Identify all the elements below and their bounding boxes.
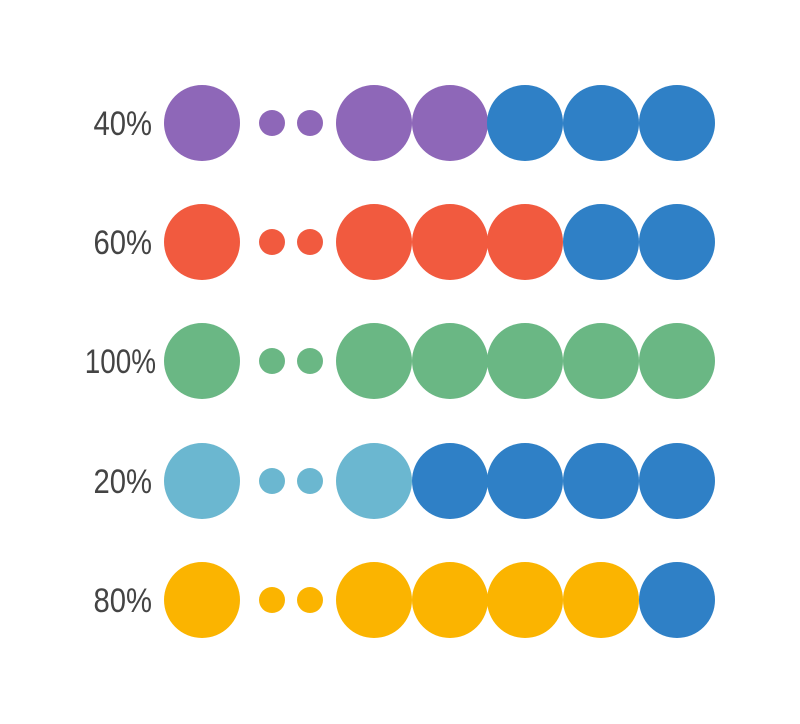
label: 40%: 40% xyxy=(94,104,152,143)
label: 20%: 20% xyxy=(94,462,152,501)
row: 40% xyxy=(94,85,715,161)
row: 100% xyxy=(85,323,715,399)
label: 60%: 60% xyxy=(94,223,152,262)
row: 80% xyxy=(94,562,715,638)
label: 100%: 100% xyxy=(85,342,156,381)
row: 60% xyxy=(94,204,715,280)
label: 80%: 80% xyxy=(94,581,152,620)
row: 20% xyxy=(94,443,715,519)
